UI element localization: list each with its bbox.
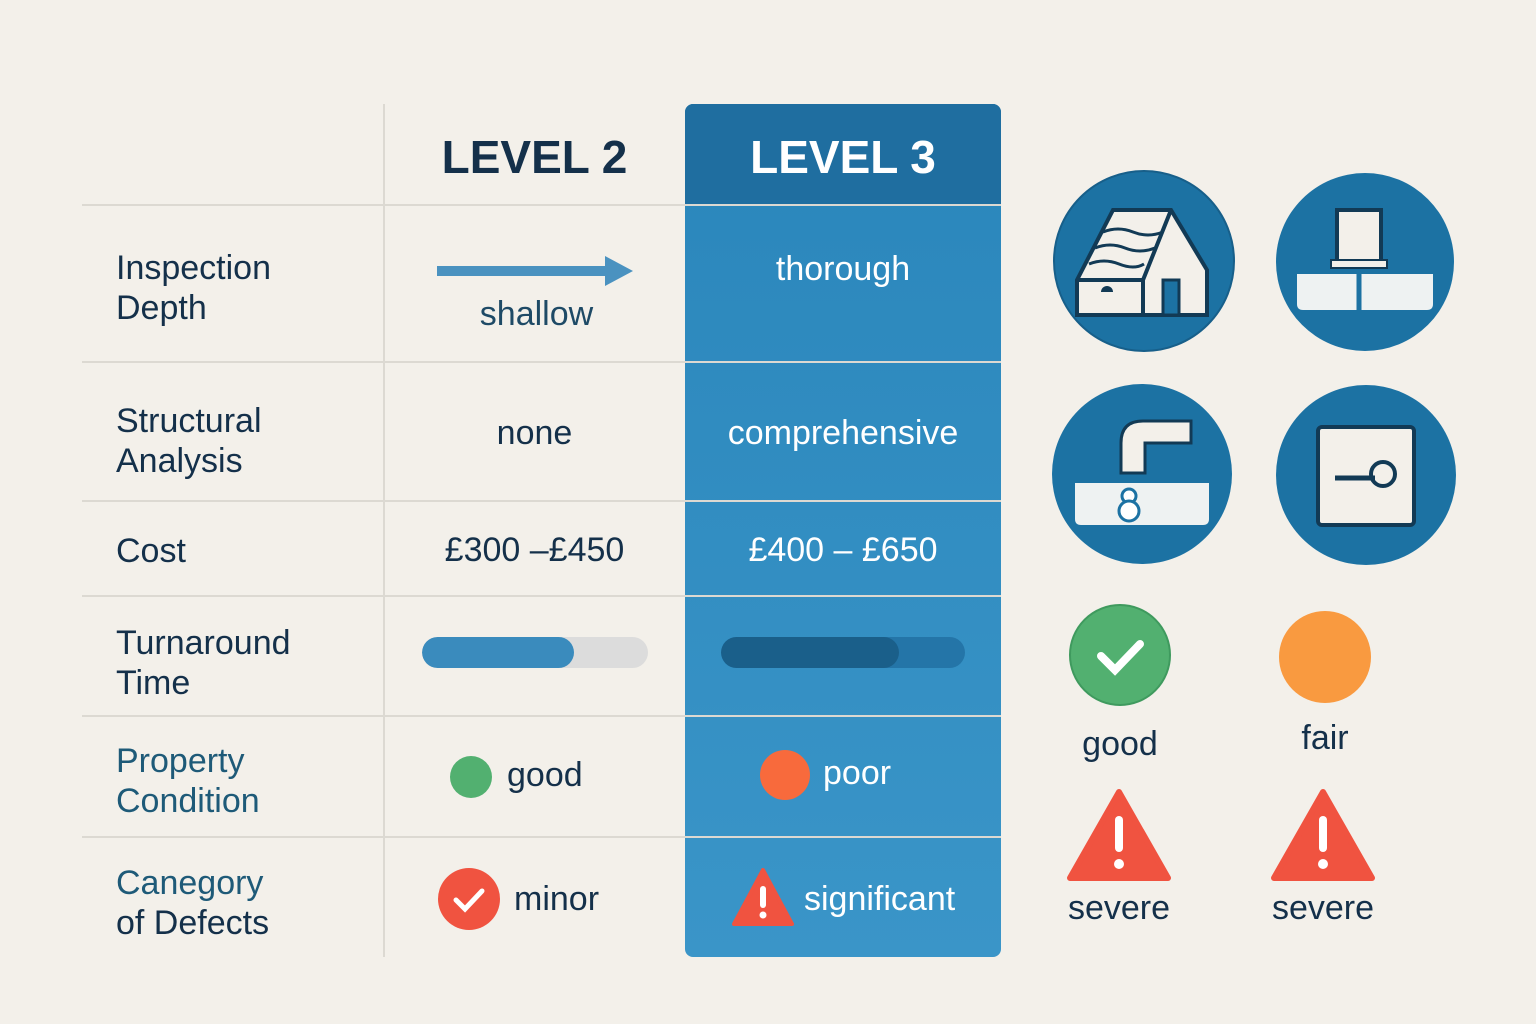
arrow: shallow — [437, 256, 633, 286]
status: minor: minor — [514, 880, 599, 918]
row label: category of defects: Canegory — [116, 864, 263, 902]
row label: structural analysis — [116, 402, 262, 480]
status: significant — [732, 868, 955, 926]
row label: property condition: Condition — [116, 782, 260, 820]
legend: fair — [1279, 611, 1371, 757]
row label: turnaround — [116, 624, 291, 702]
status: minor — [438, 868, 599, 930]
status: good: good — [507, 756, 583, 794]
status: good — [450, 756, 583, 798]
icon: house — [1053, 170, 1235, 352]
icon: pipe — [1052, 384, 1232, 564]
legend: severe 2: severe — [1272, 889, 1374, 927]
legend: good: good — [1082, 725, 1158, 763]
row label: category of defects — [116, 864, 269, 942]
legend: fair: fair — [1301, 719, 1349, 757]
text: £400 – £650 — [748, 531, 938, 569]
row label: cost: Cost — [116, 532, 186, 570]
text: shallow: shallow — [480, 295, 593, 333]
row label: property condition — [116, 742, 260, 820]
row label: structural analysis: Structural — [116, 402, 262, 440]
bar: level 2 turnaround — [422, 637, 648, 668]
legend: severe 1: severe — [1068, 889, 1170, 927]
panel: level 3 column — [685, 104, 1001, 957]
text: comprehensive — [728, 414, 958, 452]
row label: turnaround: Time — [116, 664, 190, 702]
legend: severe 2 — [1271, 789, 1375, 927]
text: thorough: thorough — [776, 250, 910, 288]
row label: inspection depth — [116, 249, 271, 327]
legend: good — [1069, 604, 1171, 763]
bar: level 3 turnaround — [721, 637, 965, 668]
status: poor — [760, 750, 891, 800]
legend: severe 1 — [1067, 789, 1171, 927]
heading: level 2: LEVEL 2 — [442, 131, 627, 183]
row label: turnaround: Turnaround — [116, 624, 291, 662]
row label: inspection depth: Inspection — [116, 249, 271, 287]
icon: foundation — [1276, 173, 1454, 351]
icon: meter — [1276, 385, 1456, 565]
text: none — [497, 414, 572, 452]
heading: level 3: LEVEL 3 — [750, 131, 936, 183]
text: £300 –£450 — [445, 531, 624, 569]
row label: property condition: Property — [116, 742, 244, 780]
row label: structural analysis: Analysis — [116, 442, 243, 480]
row label: category of defects: of Defects — [116, 904, 269, 942]
status: significant: significant — [804, 880, 955, 918]
row label: inspection depth: Depth — [116, 289, 207, 327]
status: poor: poor — [823, 754, 891, 792]
